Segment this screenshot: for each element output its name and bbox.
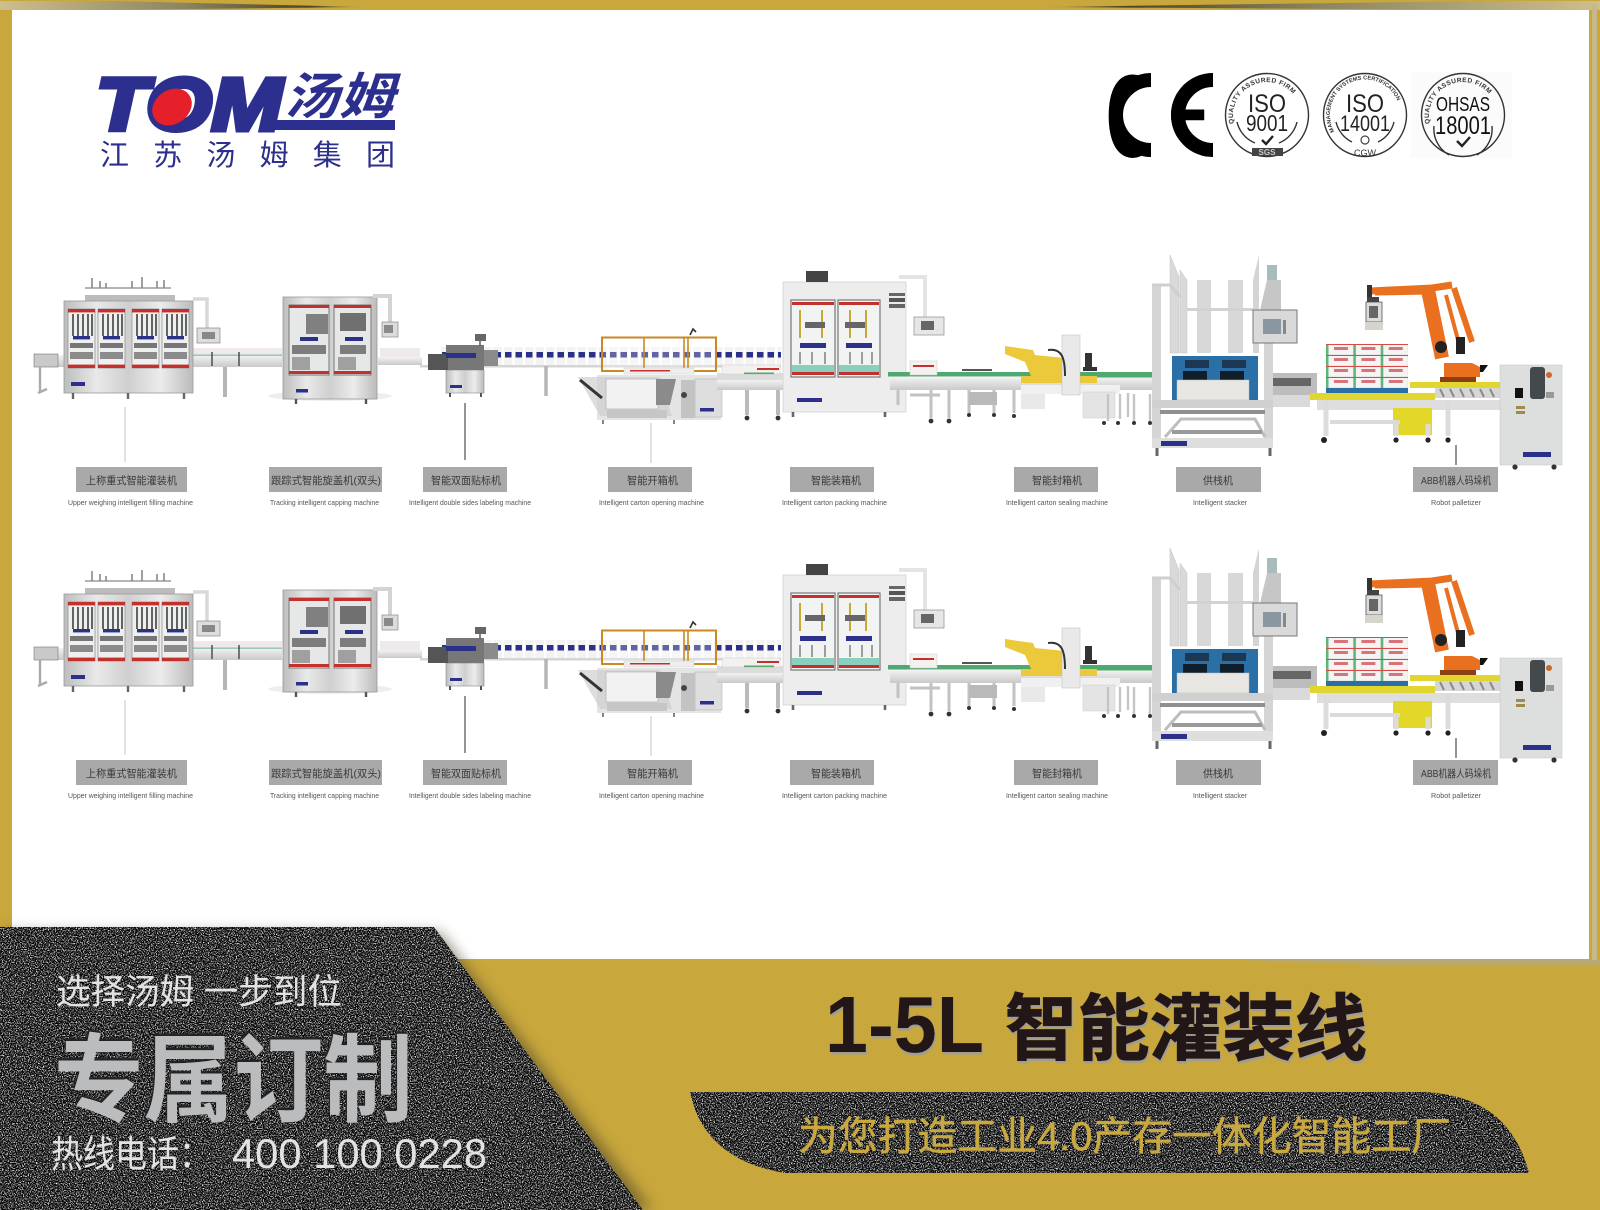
label: capping machine: Tracking intelligent capping machine <box>270 498 379 507</box>
logo: TOM 汤姆 江苏汤姆集团: TOM <box>96 63 284 146</box>
hotline <box>51 1130 487 1177</box>
production line 2 <box>34 548 1562 800</box>
label: stacker: Intelligent stacker <box>1193 498 1247 507</box>
label: filling machine: 上称重式智能灌装机 <box>86 474 177 487</box>
logo: TOM 汤姆 江苏汤姆集团: 江苏汤姆集团 <box>100 139 395 172</box>
seal: ISO 9001: ISO <box>1248 90 1286 118</box>
label: stacker: 供栈机 <box>1203 767 1233 780</box>
label: stacker: Intelligent stacker <box>1193 791 1247 800</box>
label: carton sealing machine: Intelligent carton sealing machine <box>1006 498 1108 507</box>
machine: carton packing machine <box>783 271 944 417</box>
label: robot palletizer <box>1413 760 1498 800</box>
label: labeling machine: 智能双面贴标机 <box>431 767 501 780</box>
label: filling machine: Upper weighing intelligent filling machine <box>68 498 193 507</box>
label: capping machine: 跟踪式智能旋盖机(双头) <box>271 474 381 487</box>
seal: ISO 14001 <box>1322 72 1408 158</box>
label: robot palletizer <box>1413 467 1498 507</box>
machine: upper weighing filling machine <box>34 570 282 692</box>
seal: ISO 14001: MANAGEMENT SYSTEMS CERTIFICATION <box>1326 76 1401 133</box>
seal: ISO 14001: 14001 <box>1340 111 1390 136</box>
label: labeling machine: 智能双面贴标机 <box>431 474 501 487</box>
label: carton opening machine: Intelligent carton opening machine <box>599 791 704 800</box>
label: filling machine <box>68 760 193 800</box>
label: robot palletizer: ABB机器人码垛机 <box>1421 474 1491 487</box>
machine: carton opening machine <box>578 622 783 717</box>
label: capping machine: 跟踪式智能旋盖机(双头) <box>271 767 381 780</box>
label: carton packing machine: 智能装箱机 <box>811 474 861 487</box>
label: carton opening machine <box>599 467 704 507</box>
label: capping machine: Tracking intelligent capping machine <box>270 791 379 800</box>
label: filling machine: Upper weighing intelligent filling machine <box>68 791 193 800</box>
label: carton sealing machine: Intelligent carton sealing machine <box>1006 791 1108 800</box>
label: robot palletizer: Robot palletizer <box>1431 791 1481 800</box>
label: carton sealing machine: 智能封箱机 <box>1032 474 1082 487</box>
certification marks <box>1108 72 1506 158</box>
machine: carton opening machine <box>578 329 783 424</box>
machine: robot palletizer <box>1310 578 1562 763</box>
seal: ISO 14001: CGW <box>1354 148 1376 158</box>
label: filling machine <box>68 467 193 507</box>
subtitle banner <box>690 1092 1529 1173</box>
label: filling machine: 上称重式智能灌装机 <box>86 767 177 780</box>
seal: OHSAS 18001: 18001 <box>1435 112 1491 140</box>
machine: capping machine <box>268 296 422 404</box>
seal: ISO 9001: SGS <box>1259 148 1276 157</box>
hotline: 400 100 0228 <box>232 1130 487 1177</box>
machine: carton sealing machine <box>888 628 1152 718</box>
CE mark <box>1108 73 1213 158</box>
production line 1 <box>34 255 1562 507</box>
label: carton opening machine: 智能开箱机 <box>627 767 678 780</box>
dark granite panel with slogan and hotline <box>0 927 652 1210</box>
machine: carton sealing machine <box>888 335 1152 425</box>
title: 1-5L 智能灌装线: 智能灌装线 <box>1005 990 1367 1070</box>
label: carton packing machine: Intelligent carton packing machine <box>782 791 887 800</box>
label: carton sealing machine: 智能封箱机 <box>1032 767 1082 780</box>
label: carton packing machine: Intelligent carton packing machine <box>782 498 887 507</box>
title: 1-5L 智能灌装线: 1-5L <box>825 980 984 1069</box>
machine: capping machine <box>268 589 422 697</box>
label: carton packing machine <box>782 467 887 507</box>
label: carton opening machine: Intelligent carton opening machine <box>599 498 704 507</box>
seal: ISO 9001: QUALITY ASSURED FIRM <box>1228 78 1296 124</box>
label: capping machine <box>269 467 382 507</box>
seal: ISO 14001: ISO <box>1346 90 1384 118</box>
label: carton packing machine: 智能装箱机 <box>811 767 861 780</box>
CE mark: E <box>1165 52 1210 182</box>
label: stacker: 供栈机 <box>1203 474 1233 487</box>
banner text: 为您打造工业4.0产存一体化智能工厂 <box>798 1115 1451 1159</box>
label: stacker <box>1176 467 1261 507</box>
machine: pallet stacker <box>1152 255 1317 456</box>
label: carton sealing machine <box>1006 467 1108 507</box>
seal: OHSAS 18001: QUALITY ASSURED FIRM <box>1424 78 1492 124</box>
machine: carton packing machine <box>783 564 944 710</box>
label: robot palletizer: ABB机器人码垛机 <box>1421 767 1491 780</box>
logo: TOM 汤姆 江苏汤姆集团: 汤姆 <box>284 69 402 125</box>
seal: OHSAS 18001 <box>1420 72 1506 158</box>
machine: upper weighing filling machine <box>34 277 282 399</box>
label: carton packing machine <box>782 760 887 800</box>
machine: pallet stacker <box>1152 548 1317 749</box>
label: carton opening machine: 智能开箱机 <box>627 474 678 487</box>
slogan: 选择汤姆 一步到位: 选择汤姆 一步到位 <box>56 973 342 1012</box>
machine: robot palletizer <box>1310 285 1562 470</box>
seal: ISO 9001: 9001 <box>1246 110 1288 136</box>
label: carton sealing machine <box>1006 760 1108 800</box>
logo: TOM 汤姆 江苏汤姆集团 <box>96 63 402 172</box>
seal: ISO 9001 <box>1224 72 1310 158</box>
heading: 专属订制: 专属订制 <box>54 1028 413 1135</box>
label: labeling machine: Intelligent double sides labeling machine <box>409 498 531 507</box>
label: labeling machine: Intelligent double sides labeling machine <box>409 791 531 800</box>
label: labeling machine <box>409 467 531 507</box>
label: robot palletizer: Robot palletizer <box>1431 498 1481 507</box>
hotline: 热线电话： <box>51 1134 211 1175</box>
machine: labeling machine <box>420 334 781 397</box>
label: stacker <box>1176 760 1261 800</box>
seal: OHSAS 18001: OHSAS <box>1436 94 1490 116</box>
label: capping machine <box>269 760 382 800</box>
machine: labeling machine <box>420 627 781 690</box>
CE mark: C <box>1105 49 1157 182</box>
label: labeling machine <box>409 760 531 800</box>
title: 1-5L 智能灌装线 <box>825 980 1367 1070</box>
label: carton opening machine <box>599 760 704 800</box>
